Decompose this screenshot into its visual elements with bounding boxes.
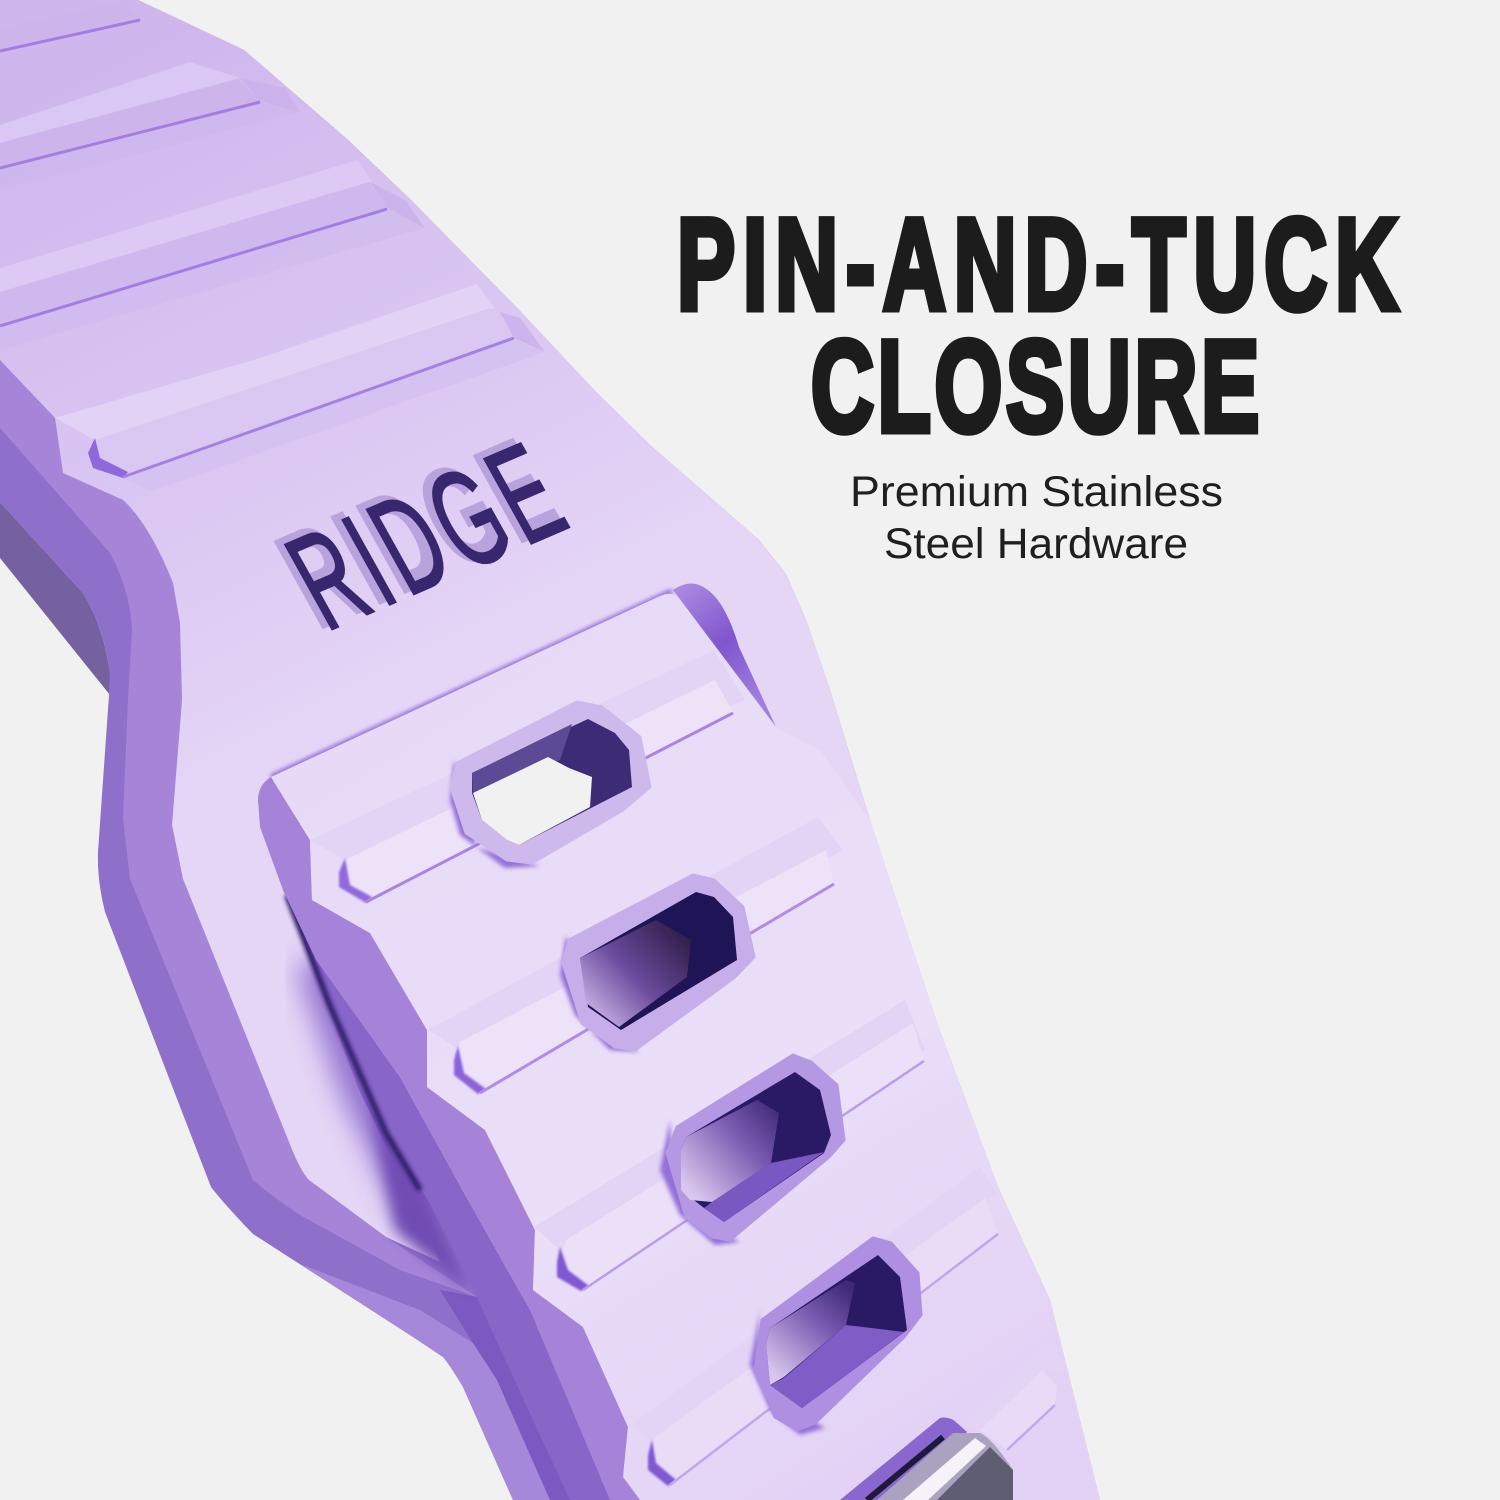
rib 2	[0, 62, 300, 190]
hole 3 back wall	[681, 1100, 779, 1202]
hole 4	[750, 1238, 921, 1435]
logo recess floor: RIDGE	[257, 412, 580, 656]
buckle brushed face	[937, 1447, 1013, 1500]
rib C	[557, 1023, 924, 1291]
stainless steel buckle	[840, 1418, 1013, 1500]
upper strap ribs	[0, 0, 545, 492]
hole 3 interior	[681, 1072, 831, 1222]
crease shadow wedge	[370, 1100, 470, 1290]
hole 1 upper wall	[472, 724, 572, 793]
hole 3 floor	[704, 1152, 824, 1222]
hole 1 opening	[473, 757, 592, 845]
hole 4 back wall	[766, 1280, 855, 1385]
headline line 2: CLOSURE	[811, 315, 1259, 459]
rib B	[454, 850, 834, 1094]
hole 3	[660, 1055, 844, 1245]
rib tint bands	[310, 650, 1067, 1447]
lavender watch band	[0, 0, 1100, 1500]
hole 1 with see-through opening	[450, 702, 650, 868]
crease dark line	[287, 895, 420, 1190]
hole 2 interior	[580, 892, 737, 1030]
hole 2	[560, 875, 754, 1052]
RIDGE logo, engraved	[257, 412, 588, 659]
rib 3	[0, 160, 425, 350]
hole 2 shadow	[560, 935, 640, 1052]
band darkest lower stripe	[440, 1290, 570, 1500]
rib 4	[55, 284, 545, 492]
lower strap side wall	[258, 777, 640, 1500]
subheading line 2: Steel Hardware	[884, 520, 1188, 568]
hole 1 shadow	[450, 760, 540, 868]
hole 2 back wall	[580, 920, 691, 1027]
band side medium layer	[0, 360, 477, 1297]
buckle recess	[840, 1418, 967, 1500]
hole 4 interior	[766, 1255, 907, 1408]
logo dark inner walls: RIDGE	[265, 415, 588, 659]
rib 1	[0, 0, 140, 51]
rib E	[980, 1370, 1057, 1450]
pocket shadow behind loop	[673, 583, 776, 727]
hole 4 rim	[755, 1238, 921, 1430]
lower strap shadow edge	[271, 591, 672, 777]
crease shade on strap	[318, 960, 425, 1215]
hole 3 shadow	[660, 1120, 740, 1245]
upper strap face	[0, 0, 1100, 1500]
buckle metal plate	[877, 1433, 1013, 1500]
hole 2 rim	[563, 875, 754, 1050]
subheading	[850, 468, 1223, 568]
subheading line 1: Premium Stainless	[850, 468, 1223, 516]
band outer dark edge	[0, 0, 1100, 1500]
headline	[677, 193, 1398, 459]
lower strap ribs	[310, 650, 1067, 1486]
buckle highlight	[903, 1438, 986, 1500]
strap side stripe	[281, 879, 610, 1500]
hole 1 rim	[451, 702, 650, 863]
buckle dark edge	[867, 1437, 943, 1500]
band back underside	[0, 502, 110, 695]
rib A	[339, 680, 733, 903]
hole 4 floor	[770, 1325, 904, 1408]
lower strap face	[271, 594, 1100, 1500]
rib D	[648, 1198, 998, 1486]
headline line 1: PIN-AND-TUCK	[677, 193, 1398, 337]
hole 4 shadow	[750, 1310, 825, 1435]
band lower outer stripe	[300, 1264, 550, 1500]
hole 1 interior	[472, 719, 632, 845]
hole 3 rim	[667, 1055, 844, 1240]
